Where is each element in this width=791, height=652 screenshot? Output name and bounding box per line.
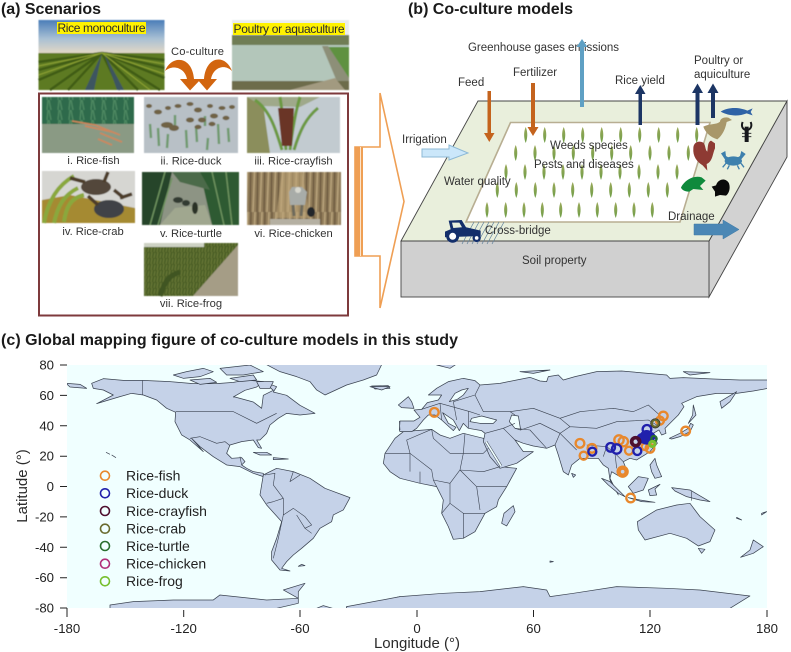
icon: lobster xyxy=(742,122,751,142)
icon: tractor xyxy=(445,220,481,241)
map xyxy=(66,364,768,611)
hatching: cross-bridge xyxy=(462,222,504,244)
legend: rice-crayfish: Rice-crayfish xyxy=(126,503,207,519)
x axis: -180 xyxy=(54,621,80,636)
frame: co-culture types xyxy=(39,94,348,316)
y axis: 0 xyxy=(47,479,54,494)
label: greenhouse gases emissions: Greenhouse gases emissions xyxy=(468,42,619,54)
photo: poultry or aquaculture xyxy=(232,20,349,90)
photo: rice-turtle xyxy=(142,172,239,225)
icon: duck xyxy=(703,117,732,139)
rice plants xyxy=(485,127,698,218)
icons: co-culture animals xyxy=(681,108,753,197)
label: fertilizer: Fertilizer xyxy=(513,67,557,79)
x axis: 120 xyxy=(639,621,661,636)
photo: rice monoculture xyxy=(38,20,164,90)
label: rice monoculture: Rice monoculture xyxy=(58,21,146,35)
icon: rooster xyxy=(693,141,715,171)
legend: rice-fish: Rice-fish xyxy=(126,468,180,484)
label: irrigation: Irrigation xyxy=(402,134,447,146)
panel: scenarios xyxy=(1,1,349,316)
photo: rice-duck xyxy=(144,97,238,153)
legend: rice-chicken: Rice-chicken xyxy=(126,556,206,572)
eurasia, africa, oceania xyxy=(347,364,768,611)
label: feed: Feed xyxy=(458,77,484,89)
legend: rice-crab: Rice-crab xyxy=(126,520,186,536)
y axis: -80 xyxy=(35,600,54,616)
panel: global map xyxy=(1,332,778,652)
label: weeds species: Weeds species xyxy=(550,140,628,152)
arrow: irrigation xyxy=(422,145,468,160)
y axis: 60 xyxy=(39,388,54,403)
field block: soil and platform xyxy=(401,101,787,297)
y axis: -20 xyxy=(35,509,54,524)
y axis: -60 xyxy=(35,570,54,585)
heading: global mapping figure: (c) Global mapping figure of co-culture models in this study xyxy=(1,332,458,349)
legend: rice-frog: Rice-frog xyxy=(126,573,183,589)
caption: rice-fish: i. Rice-fish xyxy=(67,155,120,167)
arrow: poultry into co-culture xyxy=(197,59,232,90)
arrow: drainage xyxy=(694,220,739,239)
photo: rice-chicken xyxy=(247,172,341,225)
label: co-culture: Co-culture xyxy=(171,46,224,58)
label: poultry or aquiculture: aquiculture xyxy=(694,69,750,81)
americas xyxy=(66,365,400,609)
y axis: 80 xyxy=(39,358,54,372)
arrow: aquaculture yield xyxy=(708,84,718,118)
label: cross-bridge: Cross-bridge xyxy=(485,225,551,237)
arrow: poultry yield xyxy=(692,84,703,125)
arrow: scenarios to models xyxy=(355,93,404,308)
label: soil property: Soil property xyxy=(522,255,587,267)
caption: rice-frog: vii. Rice-frog xyxy=(160,298,222,310)
photo: rice-crab xyxy=(42,171,135,223)
x axis: -60 xyxy=(290,621,310,636)
legend: rice-duck: Rice-duck xyxy=(126,485,189,501)
label: rice yield: Rice yield xyxy=(615,75,665,87)
caption: rice-crab: iv. Rice-crab xyxy=(62,226,124,238)
scatter points xyxy=(430,408,690,502)
photo: rice-crayfish xyxy=(247,97,340,153)
x axis: -120 xyxy=(170,621,197,636)
photo: rice-fish xyxy=(42,97,134,153)
label: drainage: Drainage xyxy=(668,211,715,223)
arrow: greenhouse gases xyxy=(576,39,588,107)
label: poultry or aquiculture xyxy=(694,55,750,81)
caption: rice-turtle: v. Rice-turtle xyxy=(160,228,222,240)
x axis: 180 xyxy=(756,621,778,636)
caption: rice-crayfish: iii. Rice-crayfish xyxy=(254,156,333,168)
x axis: 0 xyxy=(413,621,421,636)
arrow: feed xyxy=(484,91,494,142)
y axis title: Latitude (°) xyxy=(14,449,31,523)
legend: rice-turtle: Rice-turtle xyxy=(126,538,190,554)
x axis: 60 xyxy=(526,621,541,636)
photo: rice-frog xyxy=(144,243,238,296)
panel: co-culture models xyxy=(401,1,787,297)
y axis: 40 xyxy=(39,418,54,433)
caption: rice-chicken: vi. Rice-chicken xyxy=(254,228,333,240)
arrow: rice into co-culture xyxy=(165,60,201,90)
x axis xyxy=(54,610,778,636)
heading: (a) Scenarios: (a) Scenarios xyxy=(1,1,101,18)
label: water quality: Water quality xyxy=(444,176,511,188)
icon: frog xyxy=(681,177,706,192)
legend xyxy=(100,468,207,589)
icon: crab xyxy=(721,151,746,169)
label: pests and diseases: Pests and diseases xyxy=(534,159,634,171)
label: poultry or aquiculture: Poultry or xyxy=(694,55,743,67)
icon: turtle xyxy=(712,180,730,197)
y axis: 20 xyxy=(39,449,54,464)
icon: fish xyxy=(721,108,753,115)
arrow: fertilizer xyxy=(528,83,538,136)
arrow: rice yield xyxy=(635,85,646,125)
heading: (b) Co-culture models: (b) Co-culture models xyxy=(408,1,573,18)
caption: rice-duck: ii. Rice-duck xyxy=(161,156,222,168)
y axis xyxy=(35,358,67,616)
label: poultry or aquaculture: Poultry or aquaculture xyxy=(234,22,345,36)
y axis: -40 xyxy=(35,540,54,555)
x axis title: Longitude (°) xyxy=(374,635,460,652)
